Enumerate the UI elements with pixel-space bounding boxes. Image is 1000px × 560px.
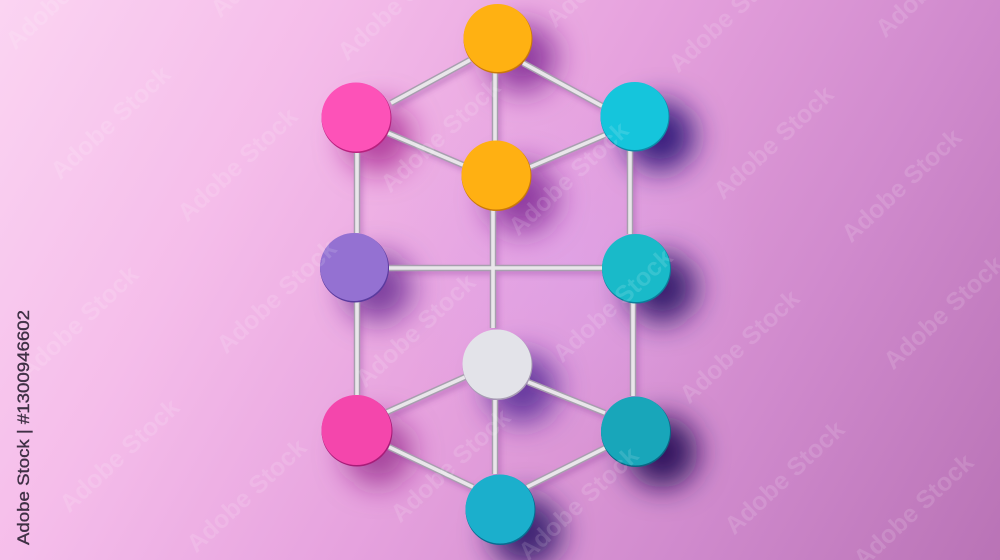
node: bottom teal [466,474,536,545]
node: upper left pink [322,82,392,153]
watermarks: Adobe Stock [172,102,303,227]
background glow [380,70,760,450]
watermarks: Adobe Stock [547,243,678,368]
node: lower right teal [601,396,671,467]
watermarks: Adobe Stock [719,415,850,540]
watermarks: Adobe Stock [674,284,805,409]
watermarks: Adobe Stock [211,234,342,359]
watermarks: Adobe Stock [54,393,185,518]
watermarks: Adobe Stock [13,260,144,385]
watermarks: Adobe Stock [708,80,839,205]
watermarks: Adobe Stock [503,116,634,241]
node: upper right cyan [600,82,670,152]
connector shadows [360,64,636,491]
node: right teal [602,234,671,304]
watermarks: Adobe Stock [375,73,506,198]
node: lower left pink [322,395,392,466]
stock credit label: Adobe Stock | #1300946602 [14,310,33,545]
connector lines [357,60,633,487]
node: top orange [464,4,532,74]
watermarks: Adobe Stock [45,60,176,185]
node: left purple [320,233,389,302]
node shadows [344,23,698,560]
node: centre orange [462,140,532,211]
watermarks: Adobe Stock [385,403,516,528]
watermarks: Adobe Stock [181,433,312,558]
watermarks: Adobe Stock [350,268,481,393]
watermarks: Adobe Stock [836,123,967,248]
node: white [462,330,532,400]
